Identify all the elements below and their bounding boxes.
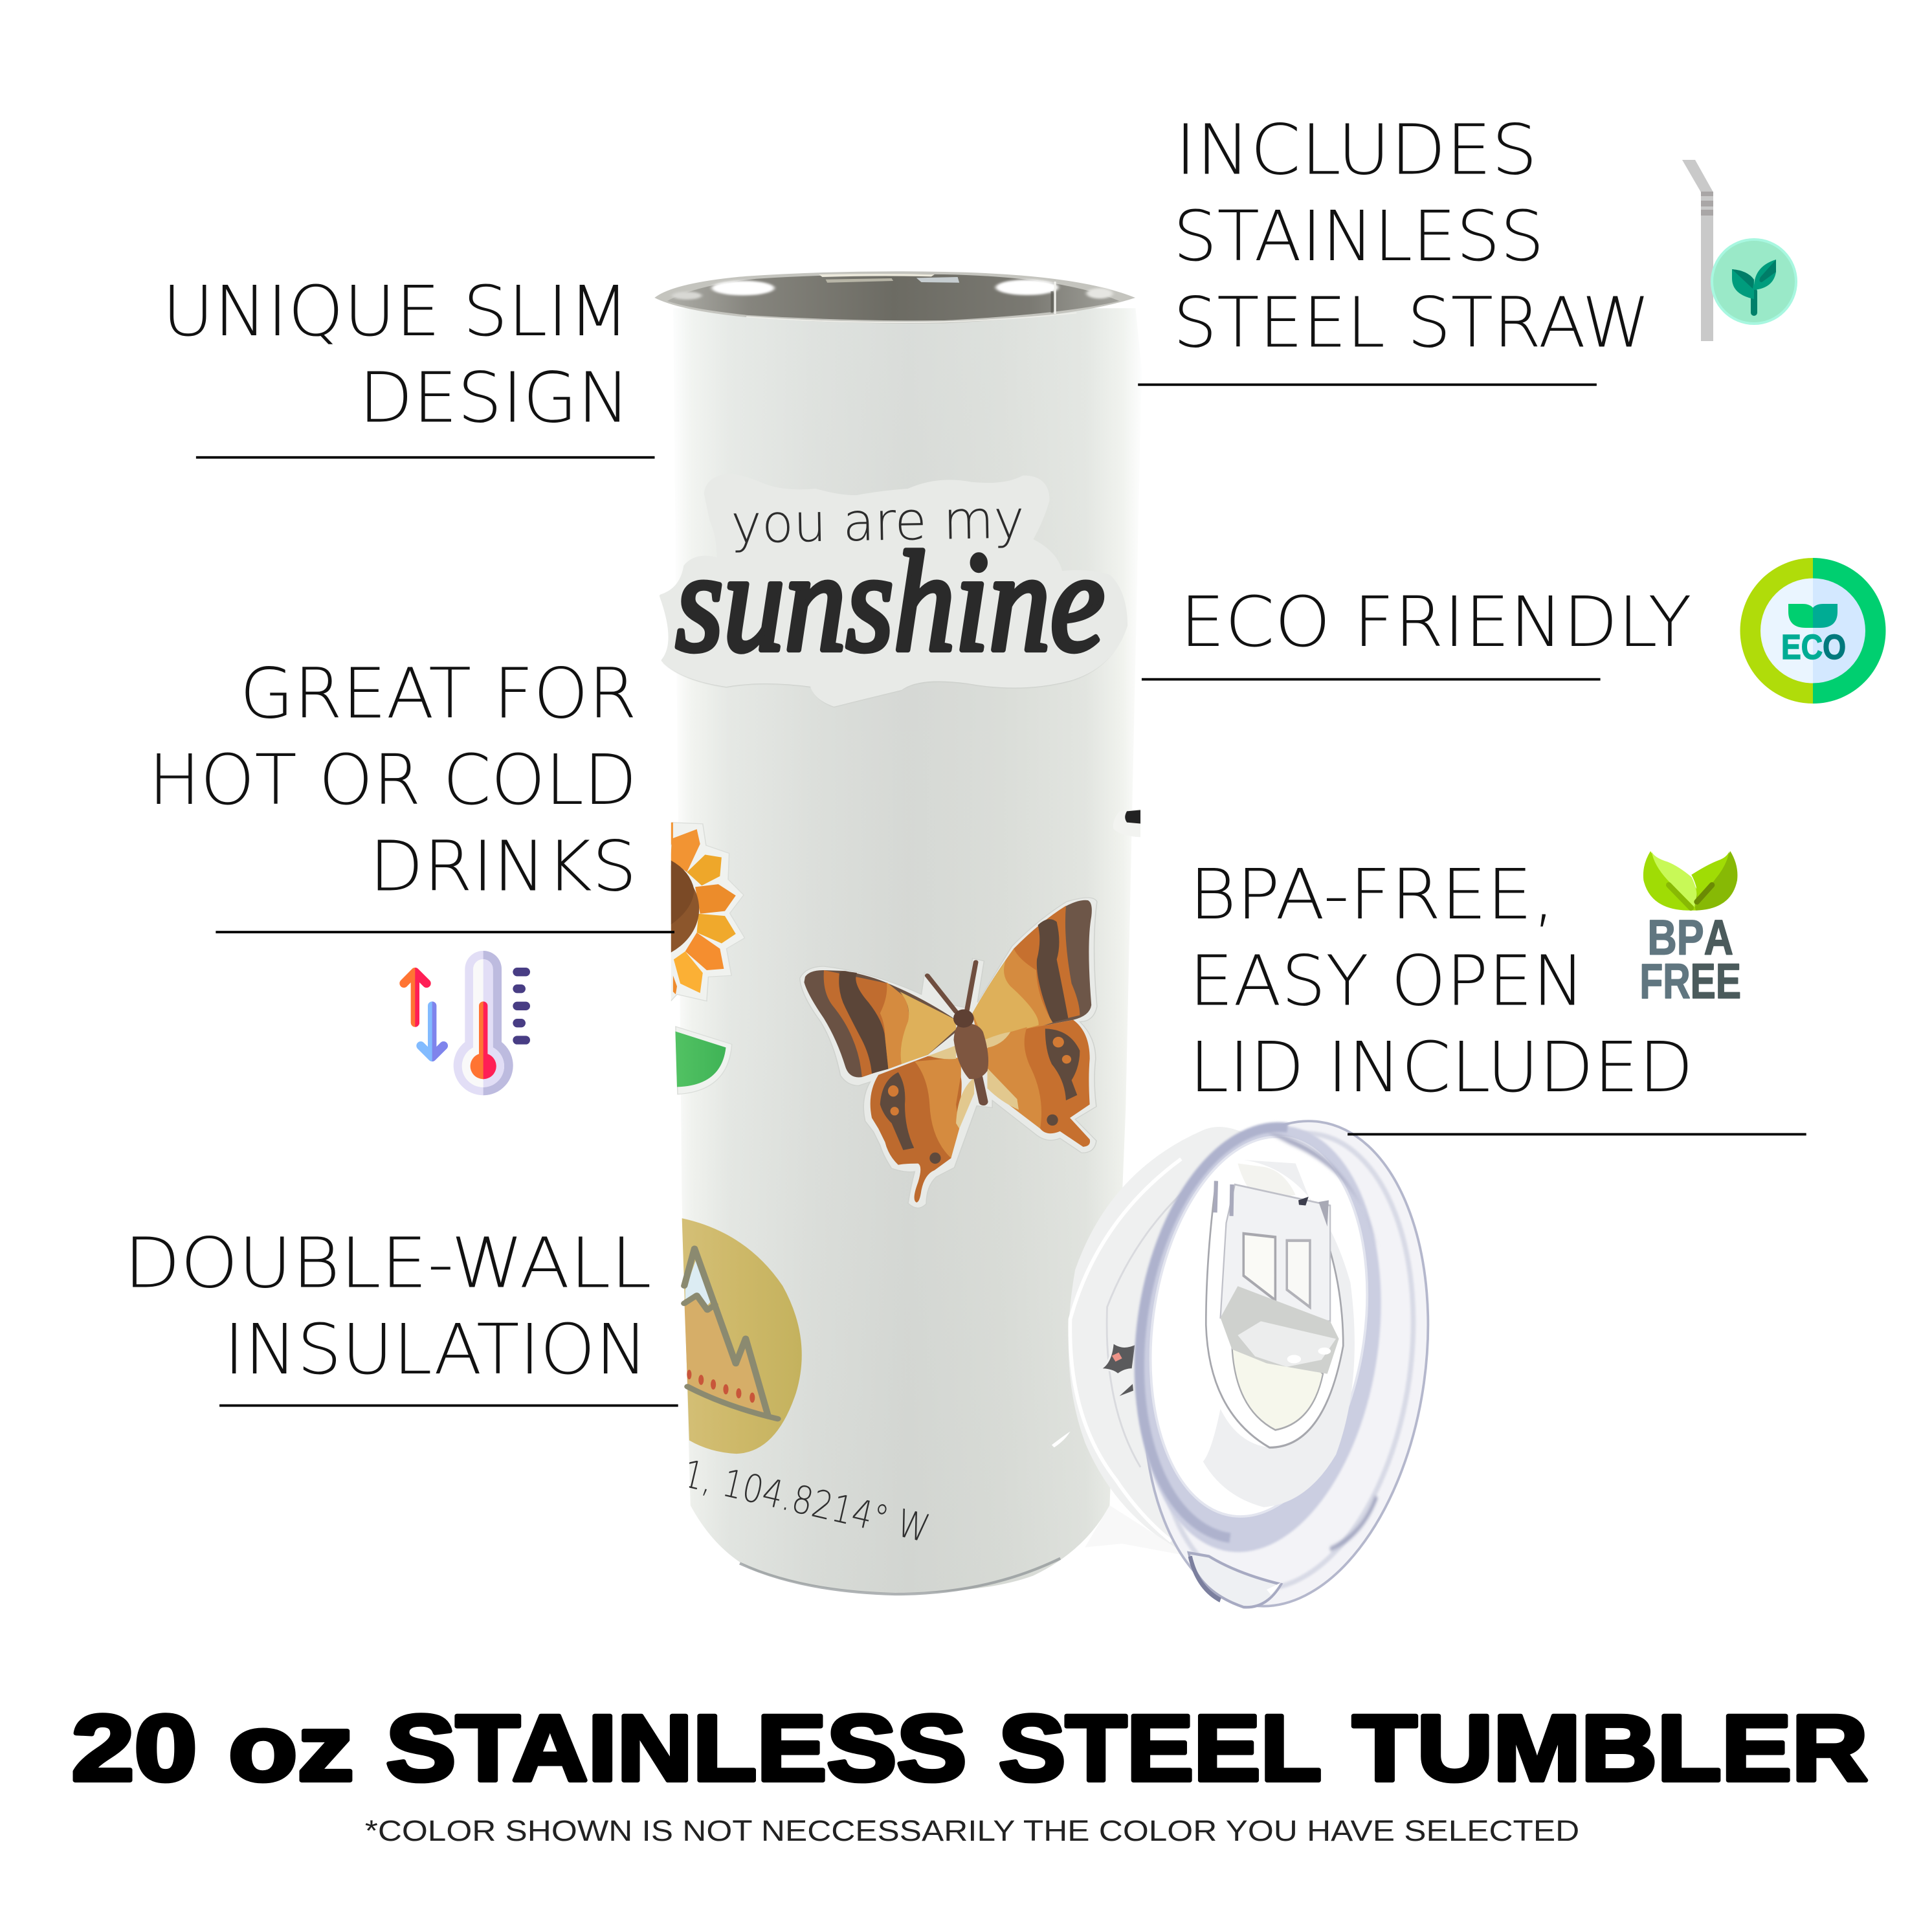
footnote: *COLOR SHOWN IS NOT NECCESSARILY THE COLOR YOU HAVE SELECTED — [365, 1814, 1579, 1847]
arrow down — [421, 1006, 443, 1057]
tumbler photo — [572, 271, 1142, 1594]
free text: FREE — [1639, 954, 1741, 1009]
arrow up — [404, 972, 427, 1023]
feature: bpa-free easy open lid: EASY OPEN — [1189, 942, 1585, 1022]
lid ring hole — [1127, 1122, 1390, 1531]
body shading — [673, 308, 1142, 1593]
lower right wing — [981, 1020, 1090, 1147]
lid back sleeve — [1069, 1127, 1282, 1556]
sticker: mountain badge — [682, 1218, 802, 1454]
eco text: ECO — [1781, 628, 1846, 667]
snow cap — [685, 1259, 712, 1306]
lid outer rim — [1114, 1102, 1458, 1625]
sleeve inner groove — [1107, 1165, 1214, 1467]
coordinates text: 1, 104.8214° W — [678, 1451, 934, 1551]
feature: includes stainless steel straw — [1138, 111, 1650, 386]
scratch highlight — [1052, 1432, 1070, 1447]
text: you are my: you are my — [731, 489, 1025, 555]
sticker: you are my sunshine — [661, 476, 1126, 707]
feature: bpa-free easy open lid: LID INCLUDED — [1189, 1028, 1693, 1108]
upper left wing — [804, 970, 956, 1077]
feature: includes stainless steel straw: STEEL STRAW — [1173, 283, 1650, 363]
feature: bpa-free easy open lid — [1189, 855, 1806, 1135]
feature: unique slim design — [162, 272, 655, 459]
base edge — [740, 1559, 1060, 1594]
sticker: sunflower — [671, 822, 745, 1002]
feature: double-wall insulation: INSULATION — [224, 1310, 648, 1390]
lid outer inner groove — [1126, 1116, 1441, 1606]
feature: eco friendly: ECO FRIENDLY — [1180, 583, 1692, 663]
feature: includes stainless steel straw: STAINLESS — [1173, 197, 1544, 277]
feature: great for hot or cold drinks: HOT OR COLD — [149, 740, 637, 821]
title: STAINLESS — [386, 1696, 966, 1801]
red dots — [687, 1370, 755, 1403]
bpa text: BPA — [1647, 911, 1733, 966]
feature: unique slim design: DESIGN — [359, 358, 630, 438]
sleeve base fade — [1085, 1505, 1188, 1556]
lid pull tab — [1188, 1553, 1281, 1607]
title: 20 oz — [71, 1696, 354, 1801]
title — [71, 1696, 1868, 1801]
sticker: butterfly — [800, 898, 1097, 1208]
feature: great for hot or cold drinks — [149, 654, 674, 933]
mountain outline — [684, 1249, 778, 1419]
feature: great for hot or cold drinks: DRINKS — [370, 827, 637, 907]
sticker: star on lid — [1100, 1342, 1136, 1396]
lid inner recess — [1203, 1160, 1355, 1507]
icon: thermometer — [404, 951, 530, 1095]
feature: unique slim design: UNIQUE SLIM — [162, 272, 629, 352]
lower left wing — [871, 1056, 962, 1203]
sip opening — [1232, 1346, 1323, 1430]
sleeve highlight — [1070, 1159, 1181, 1541]
sticker: green leaf — [675, 1027, 732, 1094]
lid — [1069, 1102, 1458, 1625]
teardrop channel — [1206, 1181, 1343, 1447]
title: TUMBLER — [1353, 1696, 1868, 1801]
icon: eco badge — [1740, 558, 1886, 704]
tumbler body — [673, 308, 1142, 1593]
lid shading crescents — [1267, 1132, 1378, 1549]
sticker: partial black mark at right edge — [1113, 809, 1140, 837]
text: sunshine: sunshine — [676, 522, 1105, 681]
slide flap — [1216, 1163, 1339, 1374]
butterfly sticker border — [800, 898, 1097, 1208]
lid ring band — [1111, 1110, 1407, 1568]
feature: bpa-free easy open lid: BPA-FREE, — [1189, 855, 1555, 935]
title: STEEL — [999, 1696, 1322, 1801]
icon: straw and sprout — [1682, 160, 1797, 341]
feature: includes stainless steel straw: INCLUDES — [1175, 111, 1537, 191]
icon: bpa free leaves — [1639, 851, 1741, 1009]
feature: double-wall insulation: DOUBLE-WALL — [124, 1224, 652, 1304]
feature: double-wall insulation — [124, 1224, 678, 1407]
upper right wing — [973, 900, 1092, 1040]
mountain fill — [684, 1294, 768, 1415]
lid ring left shading — [1114, 1111, 1287, 1538]
feature: great for hot or cold drinks: GREAT FOR — [240, 654, 637, 735]
butterfly body and antennae — [927, 962, 988, 1102]
steel rim — [654, 271, 1135, 324]
